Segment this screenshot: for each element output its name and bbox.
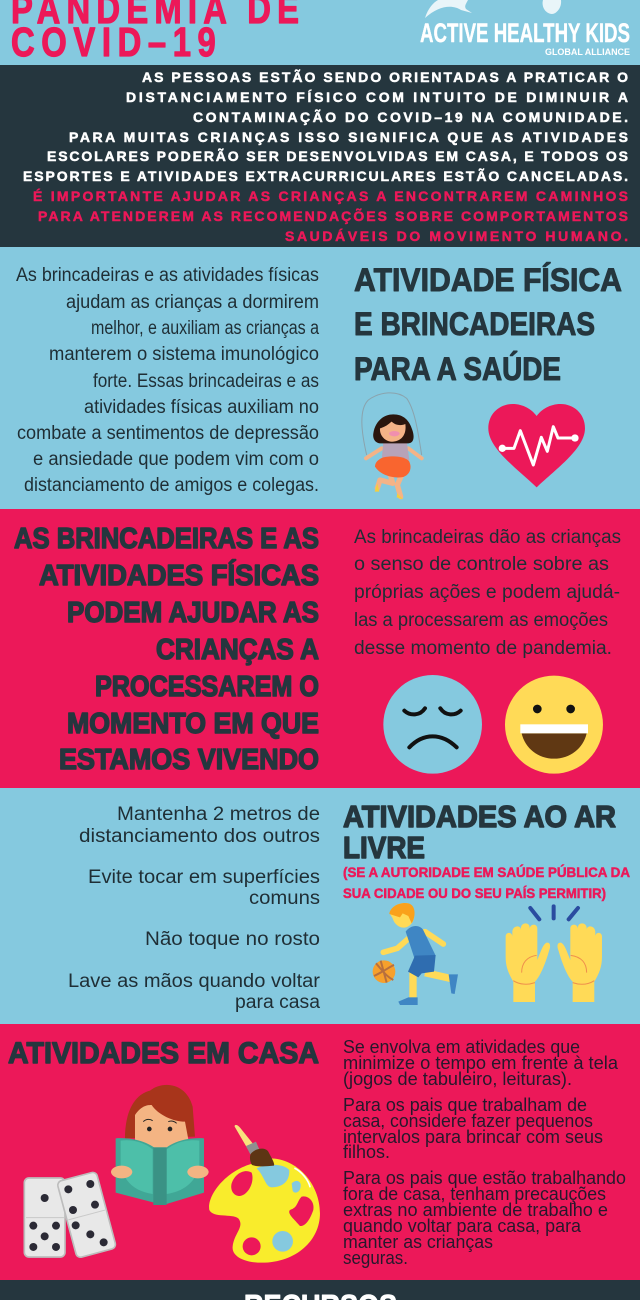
text block: benefits of play: melhor, e auxiliam as crianças a bbox=[91, 318, 319, 339]
text block: introduction white bbox=[23, 68, 628, 184]
text block: outdoor rules bbox=[68, 804, 321, 1013]
heading: outdoor activities bbox=[343, 799, 616, 865]
text block: outdoor rules: Mantenha 2 metros de bbox=[117, 804, 320, 825]
text block: home advice: Se envolva em atividades que bbox=[343, 1036, 580, 1057]
heading: play helps children process: MOMENTO EM QUE bbox=[67, 708, 319, 740]
icon: heart with pulse line bbox=[488, 404, 585, 487]
heading: play helps children process: ATIVIDADES FÍSICAS bbox=[39, 558, 319, 592]
text block: introduction white: ESPORTES E ATIVIDADES EXTRACURRICULARES ESTÃO CANCELADAS. bbox=[23, 167, 628, 184]
icon: dominoes bbox=[24, 1171, 116, 1258]
text block: home advice: extras no ambiente de trabalho e bbox=[343, 1199, 608, 1220]
text block: introduction pink: SAUDÁVEIS DO MOVIMENTO HUMANO. bbox=[285, 228, 628, 244]
text block: sense of control: las a processarem as emoções bbox=[354, 610, 608, 631]
text block: benefits of play bbox=[16, 265, 319, 496]
text block: introduction white: CONTAMINAÇÃO DO COVID–19 NA COMUNIDADE. bbox=[193, 108, 628, 125]
text block: home advice: filhos. bbox=[343, 1141, 390, 1162]
text block: outdoor note: (SE A AUTORIDADE EM SAÚDE PÚBLICA DA bbox=[343, 863, 630, 880]
text block: introduction white: ESCOLARES PODERÃO SER DESENVOLVIDAS EM CASA, E TODOS OS bbox=[47, 147, 628, 164]
heading: outdoor activities: ATIVIDADES AO AR bbox=[343, 799, 616, 834]
heading: physical activity: E BRINCADEIRAS bbox=[354, 306, 595, 342]
panel: outdoor activities bbox=[0, 788, 640, 1024]
text block: outdoor note bbox=[343, 863, 630, 901]
text block: home advice: minimize o tempo em frente à tela bbox=[343, 1052, 619, 1073]
icon: sad face bbox=[383, 675, 482, 774]
text block: home advice: manter as crianças bbox=[343, 1231, 493, 1252]
panel: physical activity and health bbox=[0, 247, 640, 509]
heading: play helps children process bbox=[14, 523, 319, 776]
text block: introduction pink: PARA ATENDEREM AS RECOMENDAÇÕES SOBRE COMPORTAMENTOS bbox=[38, 207, 628, 224]
text block: outdoor note: SUA CIDADE OU DO SEU PAÍS PERMITIR) bbox=[343, 885, 606, 901]
logo: Active Healthy Kids bbox=[420, 0, 630, 57]
icon: raised hands bbox=[506, 906, 602, 1002]
panel: home activities bbox=[0, 1024, 640, 1280]
panel: processing the moment bbox=[0, 509, 640, 788]
text block: outdoor rules: Evite tocar em superfícies bbox=[88, 867, 320, 888]
text block: home advice: fora de casa, tenham precauções bbox=[343, 1183, 606, 1204]
text block: introduction pink bbox=[33, 188, 628, 244]
text block: sense of control: próprias ações e podem ajudá- bbox=[354, 582, 620, 603]
text block: home advice: seguras. bbox=[343, 1247, 408, 1268]
text block: home advice: casa, considere fazer pequenos bbox=[343, 1110, 593, 1131]
heading: physical activity: PARA A SAÚDE bbox=[354, 351, 561, 387]
icon: happy face bbox=[505, 676, 603, 774]
text block: benefits of play: forte. Essas brincadeiras e as bbox=[93, 371, 319, 392]
panel: title header bbox=[0, 0, 640, 65]
title: COVID–19 bbox=[11, 18, 216, 65]
heading: play helps children process: CRIANÇAS A bbox=[156, 634, 319, 666]
text block: outdoor rules: comuns bbox=[249, 888, 320, 909]
text block: outdoor rules: Lave as mãos quando voltar bbox=[68, 971, 321, 992]
text block: sense of control: desse momento de pandemia. bbox=[354, 638, 612, 659]
text block: benefits of play: distanciamento de amigos e colegas. bbox=[24, 475, 319, 496]
heading: play helps children process: ESTAMOS VIVENDO bbox=[59, 744, 319, 776]
icon: logo figures bbox=[425, 0, 561, 18]
text block: home advice: quando voltar para casa, para bbox=[343, 1215, 582, 1236]
icon: paint palette and brush bbox=[209, 1125, 320, 1263]
heading: home activities: ATIVIDADES EM CASA bbox=[8, 1037, 319, 1070]
text block: home advice: intervalos para brincar com seus bbox=[343, 1126, 603, 1147]
icon: child reading a book bbox=[111, 1085, 209, 1205]
text block: outdoor rules: distanciamento dos outros bbox=[79, 826, 320, 847]
heading: physical activity bbox=[354, 262, 622, 387]
heading: play helps children process: PROCESSAREM O bbox=[95, 671, 319, 703]
text block: home advice: (jogos de tabuleiro, leituras). bbox=[343, 1068, 572, 1089]
text block: introduction pink: É IMPORTANTE AJUDAR AS CRIANÇAS A ENCONTRAREM CAMINHOS bbox=[33, 188, 628, 204]
text block: benefits of play: e ansiedade que podem vim com o bbox=[33, 449, 319, 470]
text block: home advice: Para os pais que estão trabalhando bbox=[343, 1167, 626, 1188]
text block: benefits of play: ajudam as crianças a dormirem bbox=[66, 292, 319, 313]
heading: play helps children process: AS BRINCADEIRAS E AS bbox=[14, 523, 319, 555]
heading: outdoor activities: LIVRE bbox=[343, 830, 425, 865]
text block: introduction white: DISTANCIAMENTO FÍSICO COM INTUITO DE DIMINUIR A bbox=[126, 89, 628, 105]
icon: girl jumping rope bbox=[362, 393, 422, 499]
text block: outdoor rules: para casa bbox=[235, 992, 320, 1013]
text block: benefits of play: manterem o sistema imunológico bbox=[49, 344, 319, 365]
text block: introduction white: PARA MUITAS CRIANÇAS ISSO SIGNIFICA QUE AS ATIVIDADES bbox=[69, 129, 628, 145]
text block: home advice: Para os pais que trabalham de bbox=[343, 1094, 587, 1115]
text block: benefits of play: As brincadeiras e as atividades físicas bbox=[16, 265, 319, 286]
heading: physical activity: ATIVIDADE FÍSICA bbox=[354, 262, 622, 298]
icon: child dribbling basketball bbox=[373, 903, 458, 1005]
text block: introduction white: AS PESSOAS ESTÃO SENDO ORIENTADAS A PRATICAR O bbox=[142, 68, 628, 85]
panel: resources footer bbox=[0, 1280, 640, 1300]
title bbox=[11, 0, 299, 65]
text block: sense of control: o senso de controle sobre as bbox=[354, 554, 609, 575]
text block: benefits of play: atividades físicas auxiliam no bbox=[84, 397, 319, 418]
text block: sense of control bbox=[354, 527, 621, 659]
text block: home advice bbox=[343, 1036, 626, 1268]
text block: sense of control: As brincadeiras dão as crianças bbox=[354, 527, 621, 548]
heading: play helps children process: PODEM AJUDAR AS bbox=[67, 597, 319, 629]
panel: introduction bbox=[0, 65, 640, 247]
text block: outdoor rules: Não toque no rosto bbox=[145, 929, 320, 950]
text block: benefits of play: combate a sentimentos de depressão bbox=[17, 423, 319, 444]
logo: Active Healthy Kids: GLOBAL ALLIANCE bbox=[545, 47, 630, 57]
